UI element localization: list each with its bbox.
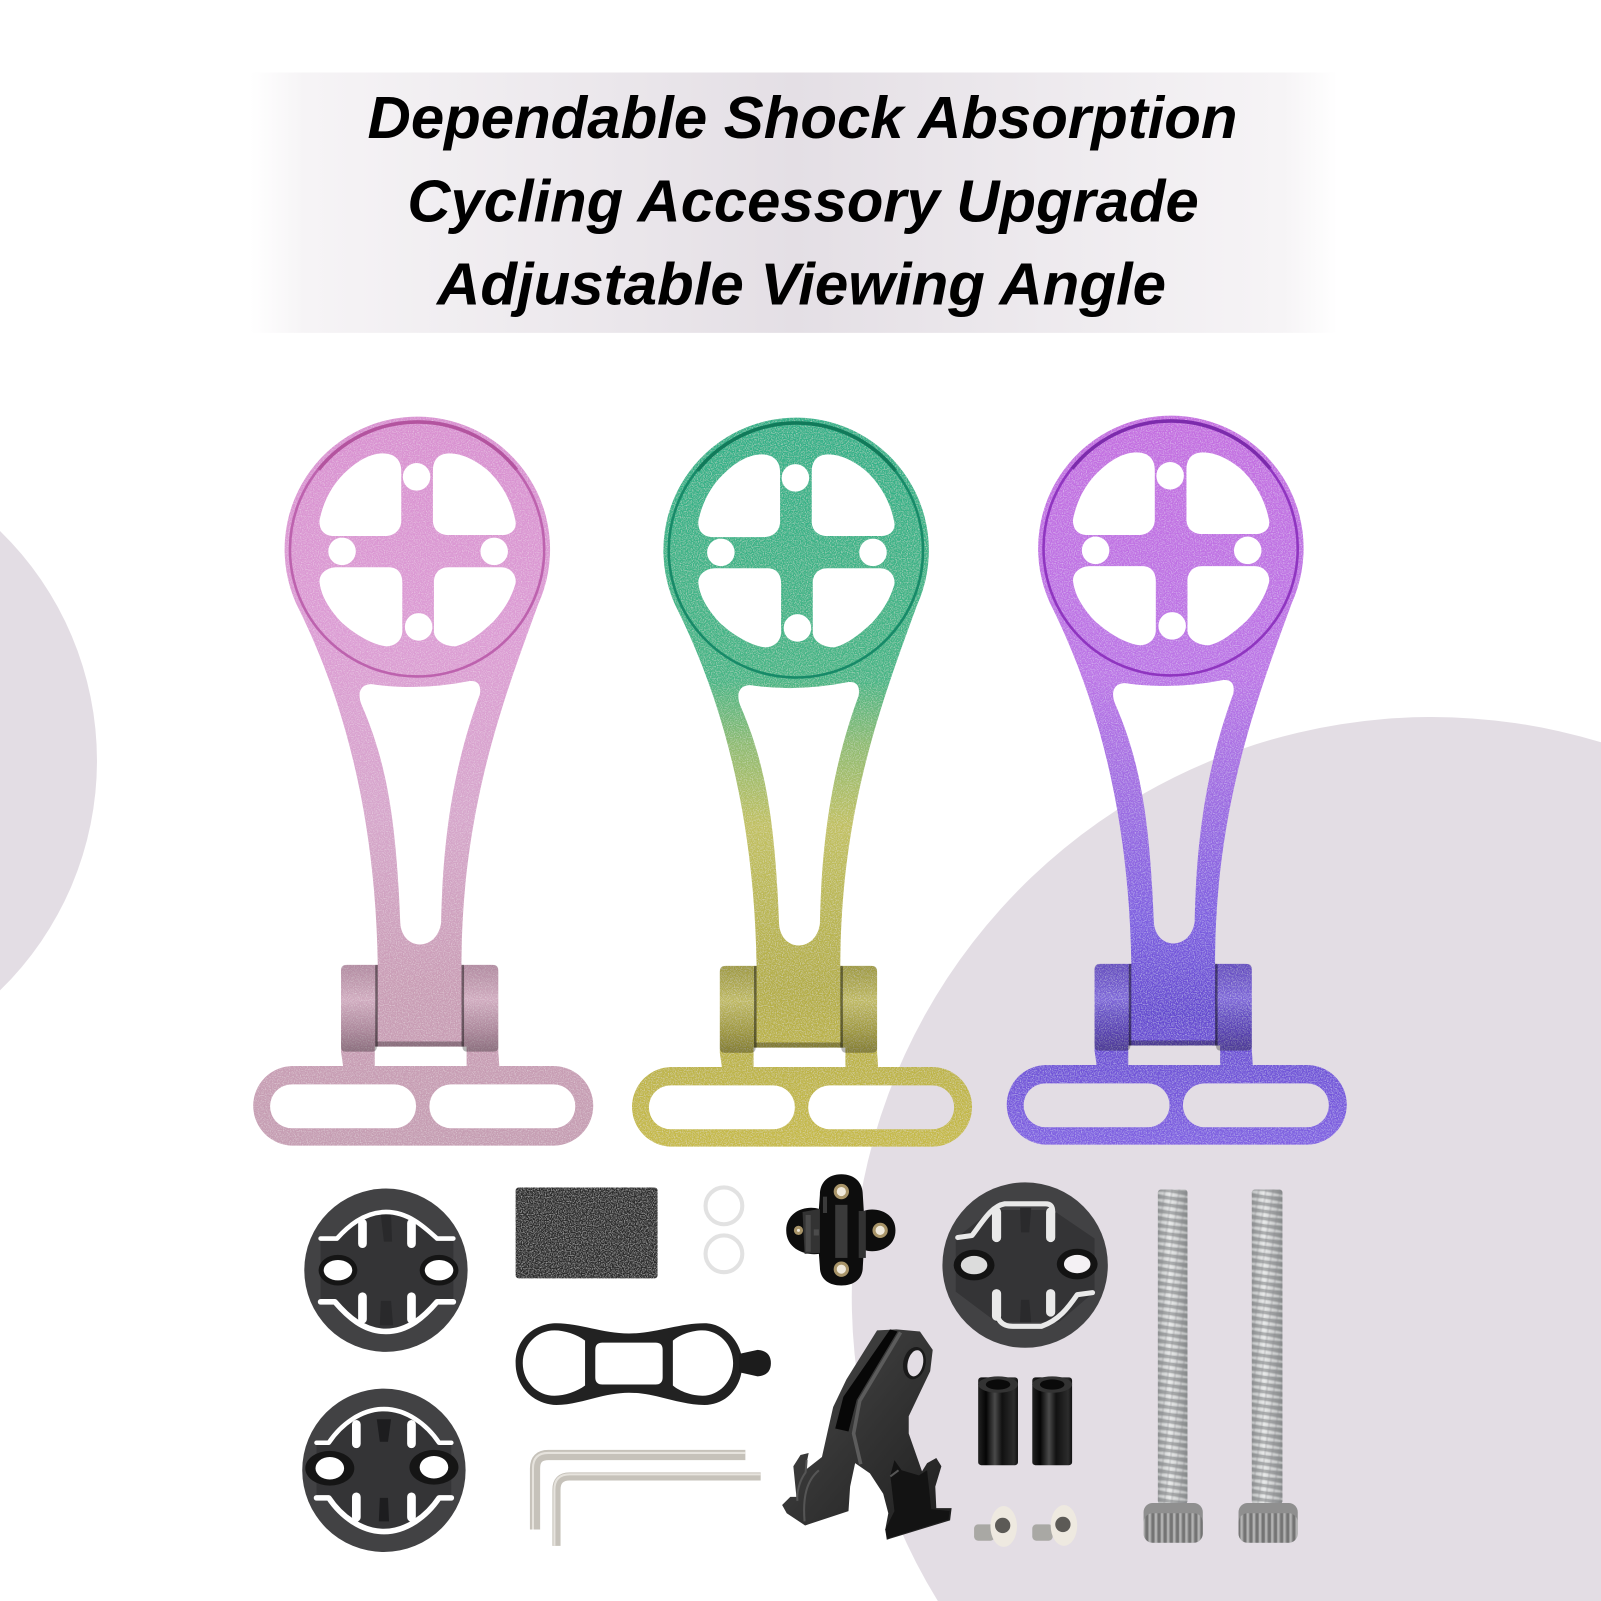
title line 3: Adjustable Viewing Angle — [435, 250, 1166, 317]
long bolt 1 — [1144, 1190, 1203, 1543]
adapter disc 3 — [942, 1182, 1108, 1348]
bracket front edge — [854, 1332, 901, 1464]
small cross mount — [786, 1174, 895, 1285]
small countersunk screws — [974, 1505, 1077, 1547]
bracket right foot — [885, 1460, 950, 1539]
mount: green to gold — [632, 418, 972, 1147]
foam pad — [516, 1187, 658, 1278]
title banner — [250, 72, 1338, 333]
background circle: left — [0, 531, 97, 990]
bracket channel — [835, 1329, 897, 1432]
spacer sleeves — [978, 1376, 1072, 1465]
adapter disc 2 — [302, 1389, 466, 1552]
adapter disc 1 — [304, 1188, 468, 1352]
title line 2: Cycling Accessory Upgrade — [407, 168, 1199, 235]
strap pull tab — [739, 1350, 771, 1376]
background circle: lower right — [852, 717, 1601, 1601]
handlebar bracket — [782, 1329, 952, 1540]
mount: pink — [253, 417, 593, 1146]
title line 1: Dependable Shock Absorption — [368, 84, 1238, 151]
rubber strap — [516, 1323, 771, 1405]
hex keys — [533, 1453, 761, 1546]
mount: purple — [1007, 416, 1347, 1145]
long bolt 2 — [1239, 1190, 1298, 1543]
bracket hole — [900, 1345, 929, 1381]
clear washers — [706, 1187, 742, 1272]
